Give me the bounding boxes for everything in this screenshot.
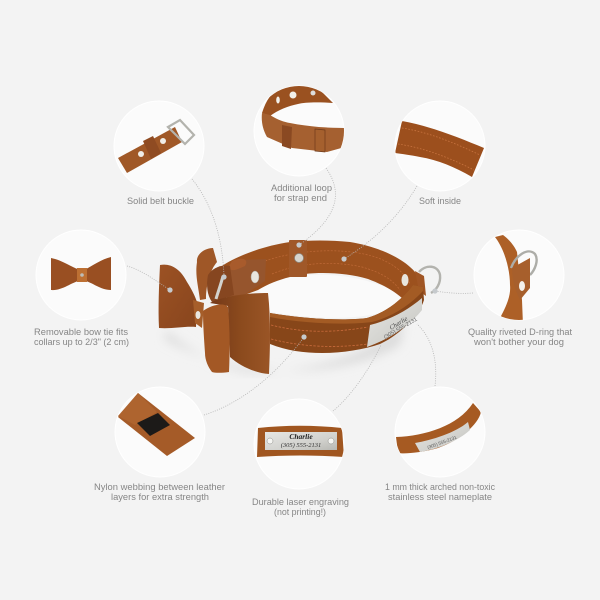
- bow left lobe: [159, 265, 197, 328]
- callout dots: [167, 242, 438, 340]
- panel: stainless nameplate: (305) 555-2131: [427, 435, 458, 450]
- collar back suede band: [222, 240, 425, 300]
- panel: removable bow tie: [34, 230, 129, 348]
- panel: stainless nameplate: stainless steel nameplate: [388, 492, 492, 503]
- leather tab holding D-ring: [415, 271, 426, 296]
- keeper loop: [289, 240, 307, 277]
- panel: laser engraving: Charlie: [289, 432, 313, 441]
- label: Soft inside: [419, 196, 461, 207]
- panel: laser engraving: [252, 399, 349, 518]
- panel: nylon webbing: layers for extra strength: [111, 492, 209, 503]
- panel: laser engraving: (305) 555-2131: [281, 442, 321, 449]
- metal nameplate: (305) 555-2131: [383, 317, 419, 341]
- label: Quality riveted D-ring that: [468, 327, 572, 338]
- collar shadow: [165, 320, 405, 373]
- leader: soft inside: [344, 186, 417, 259]
- panel: laser engraving: (not printing!): [274, 507, 326, 518]
- label: 1 mm thick arched non-toxic: [385, 482, 495, 493]
- collar inner opening: [258, 275, 405, 318]
- strap end with buckle-side loops: [224, 259, 266, 298]
- main product: leather collar with bow: [159, 240, 440, 374]
- icon: buckle strap: [118, 127, 182, 173]
- keeper rivet: [294, 254, 304, 262]
- panel: stainless nameplate: [385, 387, 495, 503]
- leader: nylon: [204, 337, 304, 415]
- bow knot: [193, 300, 204, 328]
- panel: nylon webbing: [94, 387, 225, 503]
- bow front lobe: [203, 304, 230, 373]
- back right rivet: [402, 274, 408, 286]
- panel: solid belt buckle: [114, 101, 204, 207]
- panel: additional loop: for strap end: [274, 193, 327, 204]
- icon: curved strap: [396, 403, 481, 453]
- metal nameplate: [367, 298, 422, 347]
- buckle swirl: [207, 265, 234, 302]
- panel: additional loop: [254, 85, 345, 204]
- bow right large lobe: [210, 293, 270, 374]
- label: Removable bow tie fits: [34, 327, 128, 338]
- D-ring on collar: [419, 267, 440, 293]
- leader: arched: [417, 324, 436, 386]
- leader: D-ring: [435, 291, 473, 293]
- panel: soft inside: [395, 101, 485, 207]
- strap rivet: [251, 271, 259, 283]
- leader: buckle: [192, 179, 224, 276]
- leader: bow: [127, 266, 170, 290]
- icon: bow tie: [51, 257, 111, 290]
- label: Additional loop: [271, 183, 332, 194]
- buckle clasp: [216, 276, 223, 299]
- label: Durable laser engraving: [252, 497, 349, 508]
- icon: suede strip: [395, 121, 484, 177]
- collar front leather band: [270, 285, 424, 353]
- leader: loop: [299, 168, 335, 245]
- bow rivet: [196, 311, 200, 319]
- bow back-left upper loop: [196, 248, 217, 300]
- icon: loop strap: [262, 113, 345, 152]
- panel: removable bow tie: collars up to 2/3" (2 cm): [34, 337, 129, 348]
- leader: plate: [333, 345, 381, 411]
- icon: layered strap: [118, 393, 195, 456]
- icon: strap top suede: [262, 85, 333, 116]
- icon: strap with nameplate: [257, 426, 344, 457]
- panel: D-ring: [468, 230, 572, 348]
- panel: D-ring: won't bother your dog: [473, 337, 564, 348]
- nameplate engraving: Charlie: [388, 315, 409, 332]
- label: Solid belt buckle: [127, 196, 194, 207]
- label: Nylon webbing between leather: [94, 482, 225, 493]
- icon: strap with D-ring: [495, 235, 523, 325]
